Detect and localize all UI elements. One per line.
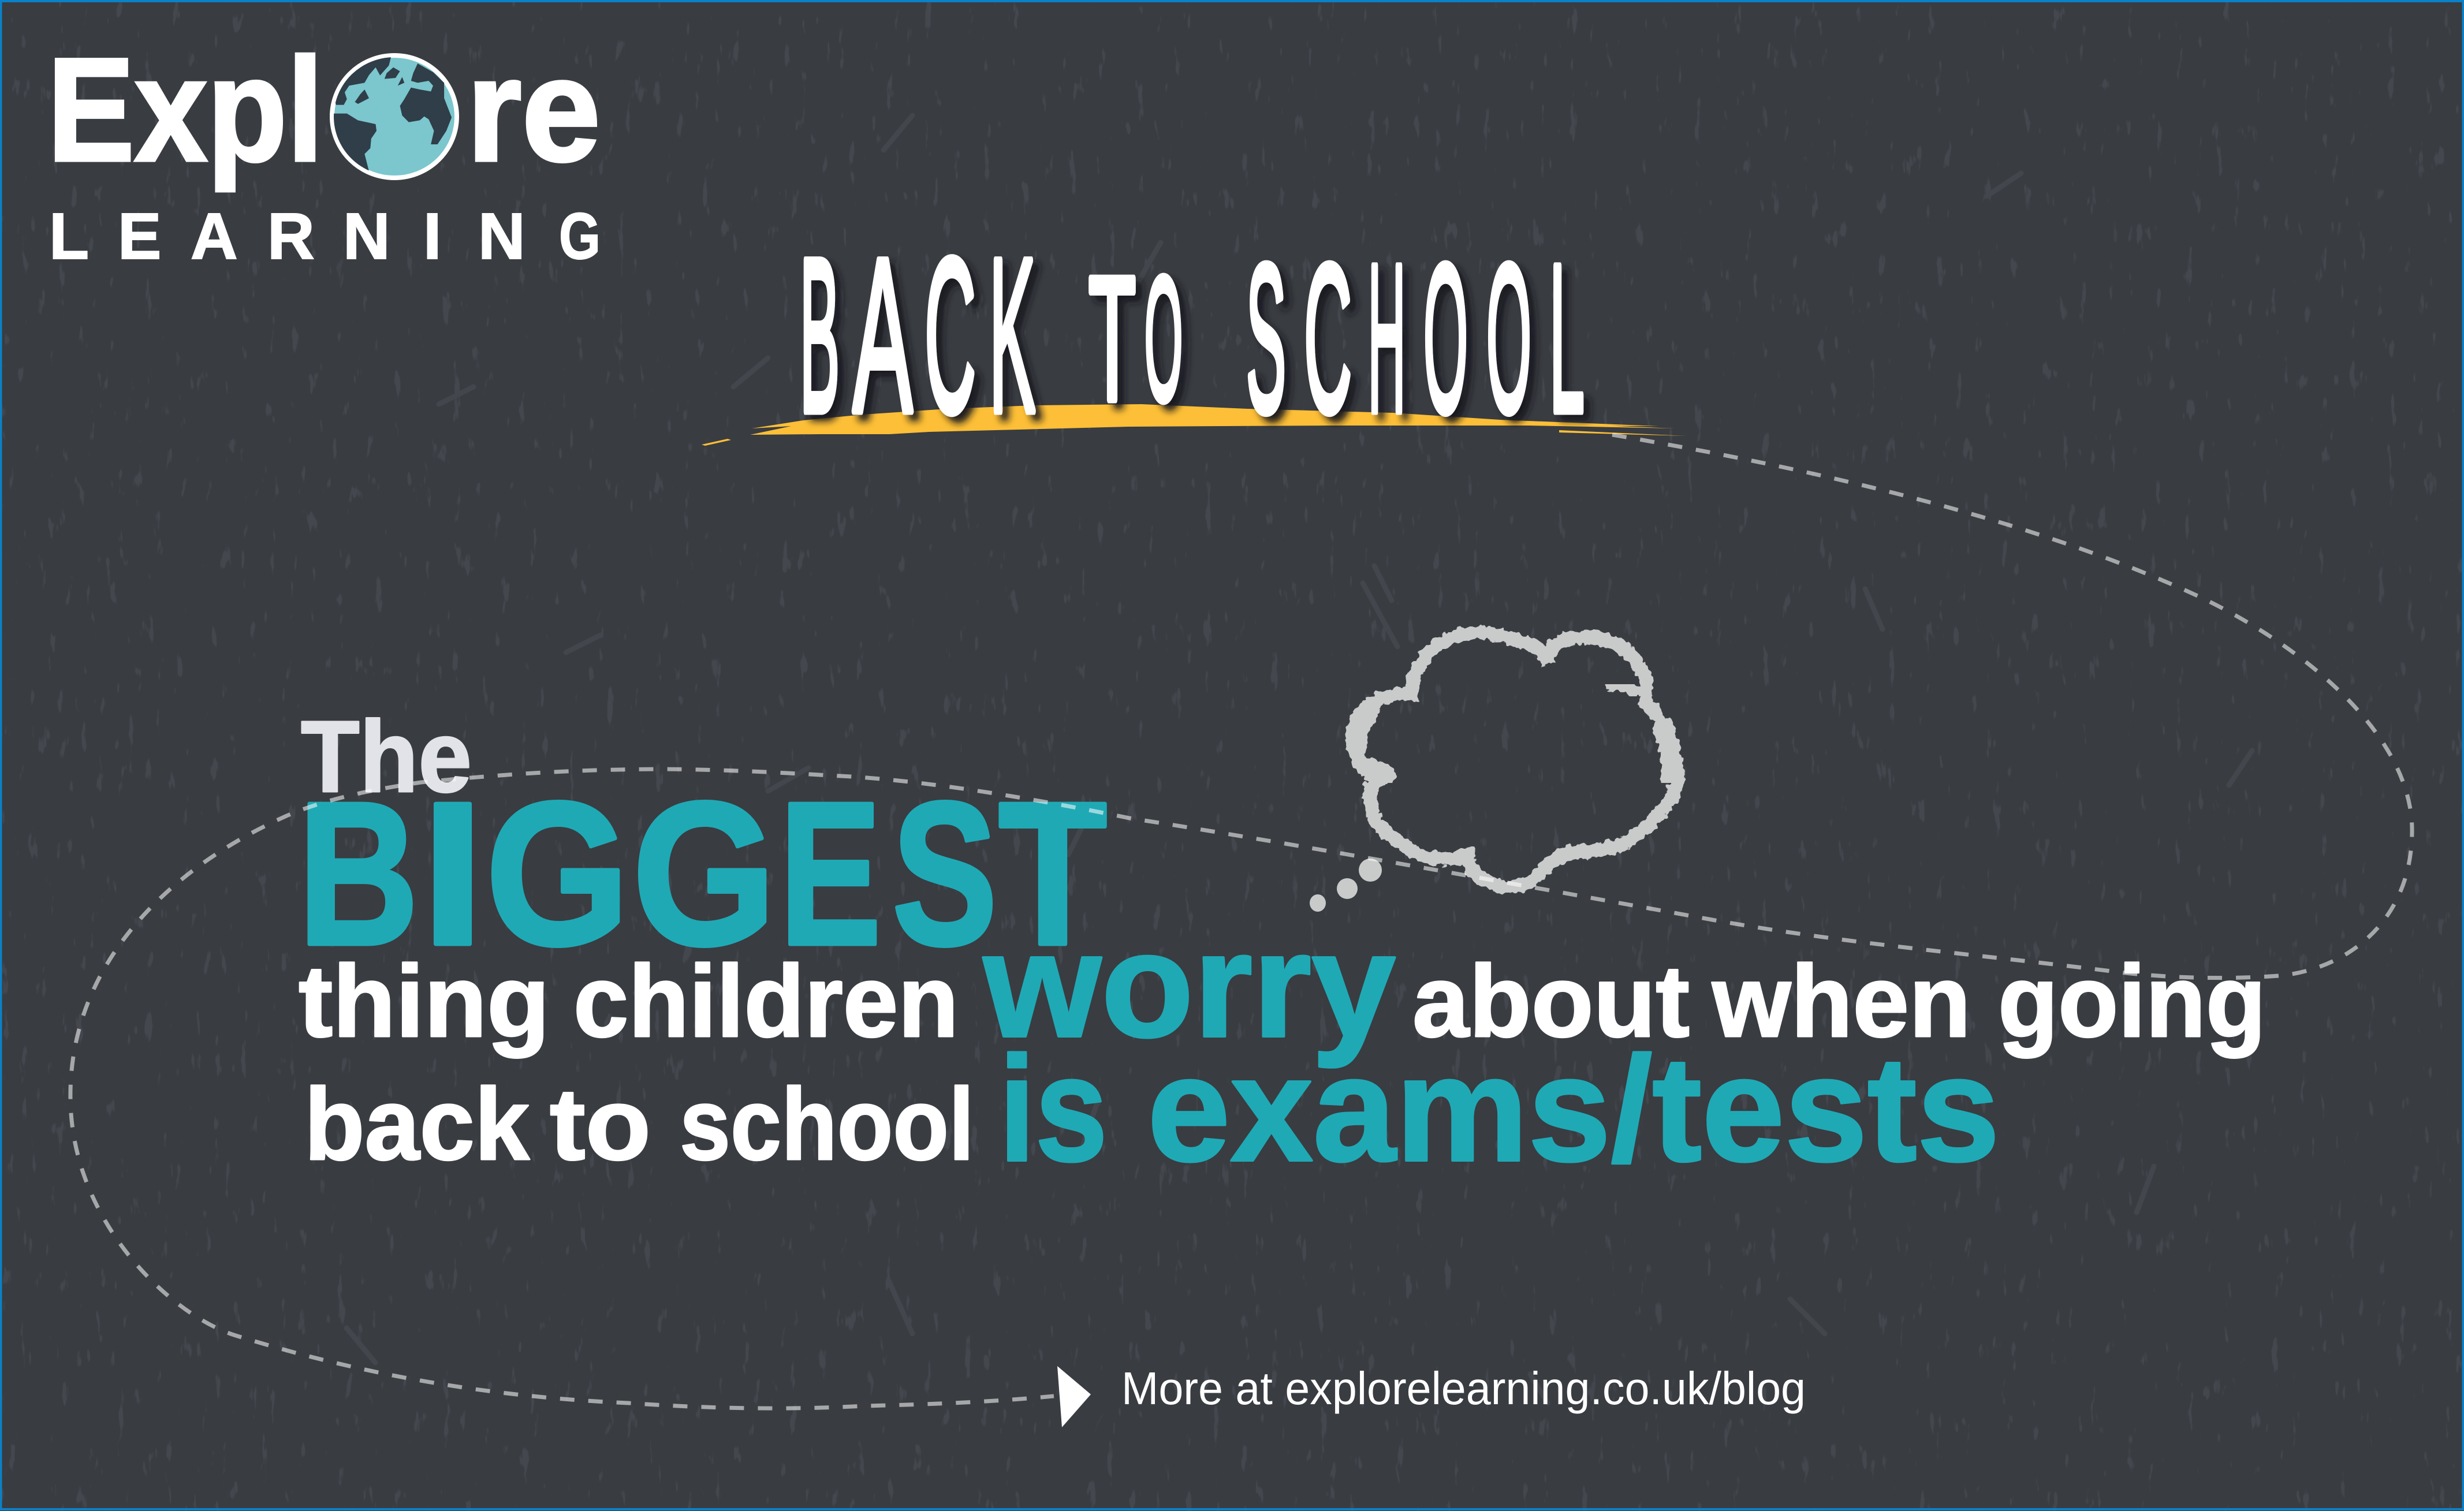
- brush stroke underline: [702, 404, 1686, 446]
- headline word: worry: worry: [981, 901, 1397, 1069]
- text: L: [1549, 221, 1585, 456]
- arrow head: [1057, 1366, 1091, 1427]
- headline line 3 start: back: [304, 1067, 530, 1181]
- headline line 3 start: to: [550, 1067, 651, 1181]
- title: Back to School: H: [1368, 221, 1406, 456]
- logo subtitle: G: [559, 200, 601, 273]
- title: Back to School: T: [1089, 240, 1136, 437]
- logo wordmark: [47, 28, 601, 192]
- title: Back to School: A: [853, 212, 913, 458]
- title: Back to School: B: [800, 212, 840, 458]
- title: Back to School: O: [1145, 240, 1183, 437]
- logo subtitle: LEARNIN: [49, 200, 525, 273]
- title: Back to School: S: [1246, 221, 1286, 456]
- headline line 2 end: going: [1998, 944, 2266, 1058]
- icon: thought cloud: [1310, 633, 1677, 912]
- headline word: BIGGEST: T: [998, 759, 1107, 987]
- dashed looping path: [70, 435, 2412, 1408]
- cloud thick chalk patches: [1357, 711, 1671, 779]
- headline: [298, 700, 2266, 1192]
- title: Back to School: K: [989, 212, 1035, 458]
- logo: Explore Learning: [53, 52, 598, 260]
- headline word: BIGGEST: E: [780, 759, 881, 987]
- headline line 2 start: thing: [299, 944, 550, 1058]
- logo wordmark: Expl: [47, 28, 323, 192]
- cloud inner hook: [1606, 685, 1640, 696]
- thought bubble dots: [1310, 859, 1382, 912]
- headline word: The: The: [301, 700, 472, 814]
- cloud outline: [1352, 633, 1677, 887]
- title: Back to School: O: [1423, 221, 1468, 456]
- title: Back to School: C: [1304, 221, 1352, 456]
- headline word: BIGGEST: G: [486, 759, 629, 987]
- headline word: BIGGEST: G: [632, 759, 776, 987]
- headline line 2 start: children: [573, 944, 959, 1058]
- title: Back to School: O: [1486, 221, 1531, 456]
- headline word: BIGGEST: B: [298, 759, 419, 987]
- headline line 3 end: exams/tests: [1147, 1025, 2000, 1192]
- headline line 2 end: when: [1712, 944, 1971, 1058]
- headline line 3 start: school: [680, 1067, 974, 1181]
- headline word: BIGGEST: S: [892, 759, 997, 987]
- headline word: BIGGEST: I: [420, 759, 485, 987]
- title: Back to School: [800, 212, 1585, 458]
- logo wordmark: re: [467, 28, 601, 192]
- title: Back to School: C: [925, 212, 976, 458]
- headline line 2 end: about: [1412, 944, 1690, 1058]
- footer link text: More at explorelearning.co.uk/blog: [1121, 1363, 1806, 1414]
- icon: globe: [327, 55, 457, 178]
- headline line 3 end: is: [999, 1025, 1108, 1192]
